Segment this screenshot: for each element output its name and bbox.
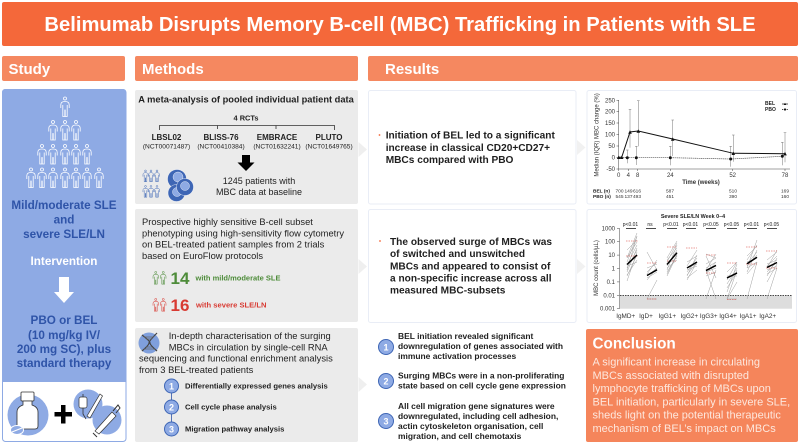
line: BEL xyxy=(617,129,787,159)
result card 2 xyxy=(368,210,576,322)
step 3 xyxy=(164,422,284,436)
description text: In-depth characterisation of the surging xyxy=(169,331,331,341)
chart card: MBC change over time xyxy=(587,90,796,204)
heading: methods: Methods xyxy=(142,61,204,78)
median lines xyxy=(627,253,777,278)
connector line xyxy=(170,386,172,429)
step 1: 1 xyxy=(169,382,174,392)
result 2: state based on cell cycle gene expression xyxy=(398,381,566,391)
y axis title: Median (IQR) MBC change (%) xyxy=(594,93,600,177)
patient counts table: 510 xyxy=(729,188,737,194)
y axis labels: 200 xyxy=(605,110,616,116)
description text: sequencing and functional enrichment analysis xyxy=(139,354,333,364)
significance labels: p<0.01 xyxy=(744,222,759,228)
arrows: results to charts xyxy=(577,140,586,274)
legend: BEL xyxy=(765,101,775,107)
y axis labels: 250 xyxy=(605,98,616,104)
significance labels: p<0.05 xyxy=(703,222,719,228)
patient counts table: 616 xyxy=(633,188,641,194)
y axis labels: 10 xyxy=(608,253,616,259)
below-detection band xyxy=(620,296,792,309)
result card 1: increase in classical CD20+CD27+ xyxy=(386,143,550,154)
y axis labels: 1000 xyxy=(602,226,616,232)
y axis labels: -50 xyxy=(606,167,616,173)
conclusion text: MBCs associated with disrupted xyxy=(592,370,749,382)
x axis title: Time (weeks) xyxy=(682,180,720,186)
significance labels: ns xyxy=(647,222,653,228)
category labels: IgG2+ xyxy=(681,313,698,320)
patient counts table: 169 xyxy=(781,188,789,194)
y axis labels: 0.001 xyxy=(600,307,616,313)
panel: RNA sequencing xyxy=(135,328,358,442)
category labels: IgMD+ xyxy=(616,313,635,320)
result list xyxy=(378,331,566,441)
trial names: LBSL02 xyxy=(152,133,182,142)
category labels: IgG4+ xyxy=(719,313,737,320)
intervention text: 200 mg SC), plus xyxy=(17,343,112,356)
y axis labels: 100 xyxy=(605,240,616,246)
error bars PBO xyxy=(626,142,784,167)
patient counts table: 160 xyxy=(781,194,789,200)
description text: on BEL-treated patient samples from 2 trials xyxy=(142,240,325,250)
y axis xyxy=(617,228,620,309)
y axis labels: 0.1 xyxy=(607,280,616,286)
result 3: 3 xyxy=(383,416,389,426)
description text: from 3 BEL-treated patients xyxy=(139,365,254,375)
step 1: Differentially expressed genes analysis xyxy=(185,382,328,390)
category labels: IgD+ xyxy=(639,313,653,320)
arrow: down xyxy=(54,277,74,303)
result 3: downregulated, including cell adhesion, xyxy=(398,411,558,421)
patient counts table: 545 xyxy=(615,194,624,200)
panel: meta-analysis xyxy=(135,90,358,204)
trial identifiers: (NCT00071487) xyxy=(143,144,190,150)
y axis labels: 50 xyxy=(608,144,616,150)
result 1: BEL initiation revealed significant xyxy=(398,331,534,341)
patient counts table: BEL (n) xyxy=(593,188,610,194)
patient counts table: 700 xyxy=(615,188,624,194)
result 3 xyxy=(378,401,558,441)
chart title: Severe SLE/LN Week 0–4 xyxy=(661,214,725,220)
threshold line xyxy=(620,294,792,296)
severe cohort: with severe SLE/LN xyxy=(195,300,266,310)
result card 1: MBCs compared with PBO xyxy=(386,155,514,166)
patient counts table: 390 xyxy=(729,194,737,200)
individual patient lines xyxy=(627,233,777,299)
result card 2: of switched and unswitched xyxy=(390,249,525,260)
x axis labels: 78 xyxy=(782,173,789,179)
result 1: immune activation processes xyxy=(398,351,516,361)
heading: results xyxy=(368,56,798,81)
x axis labels: 24 xyxy=(667,173,674,179)
y axis labels: 0.01 xyxy=(603,293,616,299)
icon: patient pyramid xyxy=(27,97,103,188)
icon: tablets bottle xyxy=(8,392,48,436)
description text: based on EuroFlow protocols xyxy=(142,251,263,261)
significance labels: p<0.01 xyxy=(623,222,638,228)
trial names: BLISS-76 xyxy=(203,133,239,142)
population text: and xyxy=(54,214,74,226)
line: PBO xyxy=(619,155,784,160)
step 2: Cell cycle phase analysis xyxy=(185,402,277,412)
reference dashes xyxy=(626,241,777,300)
label: 4 RCTs: 4 RCTs xyxy=(234,114,258,122)
population text: Mild/moderate SLE xyxy=(11,199,117,212)
conclusion text: BEL initiation, particularly in severe SLE, xyxy=(592,396,790,408)
severe cohort xyxy=(153,296,266,315)
panel heading: A meta-analysis of pooled individual patient data xyxy=(138,94,355,104)
conclusion text: mechanism of BEL’s impact on MBCs xyxy=(592,423,776,435)
error bars BEL xyxy=(629,101,786,162)
result 1 xyxy=(378,331,563,361)
icon: B cells xyxy=(168,170,194,202)
panel: flow cytometry xyxy=(135,209,358,322)
heading: results: Results xyxy=(385,61,439,78)
significance brackets xyxy=(626,228,777,230)
intervention text: PBO or BEL xyxy=(31,314,97,327)
result 2: Surging MBCs were in a non-proliferating xyxy=(398,371,564,381)
y axis labels: 0 xyxy=(612,155,616,161)
result card 2: MBCs and appeared to consist of xyxy=(390,262,551,272)
significance labels: p<0.05 xyxy=(724,222,739,228)
intervention text: standard therapy xyxy=(17,357,112,370)
description text: phenotyping using high-sensitivity flow cytometry xyxy=(142,228,344,238)
heading: study xyxy=(2,56,125,81)
result 3: actin cytoskeleton organisation, cell xyxy=(398,421,543,431)
x axis labels: 8 xyxy=(636,173,640,179)
description text: MBCs in circulation by single-cell RNA xyxy=(169,342,328,352)
y axis title: MBC count (cells/µL) xyxy=(594,240,600,296)
x axis labels: 0 xyxy=(617,173,621,179)
population text: severe SLE/LN xyxy=(23,228,105,241)
patient count text: 1245 patients with xyxy=(223,176,295,186)
significance labels: p<0.01 xyxy=(663,222,679,228)
description text: Prospective highly sensitive B-cell subset xyxy=(142,217,313,227)
patient counts table xyxy=(593,188,789,200)
trial identifiers: (NCT01649765) xyxy=(305,144,353,150)
trial identifiers: (NCT00410384) xyxy=(197,144,245,150)
patient counts table: 493 xyxy=(633,194,641,200)
mild/moderate cohort xyxy=(153,269,281,288)
title banner xyxy=(2,2,798,46)
step 3: Migration pathway analysis xyxy=(185,424,284,434)
result 3: migration, and cell chemotaxis xyxy=(398,431,522,441)
intervention label: Intervention xyxy=(31,255,97,268)
x axis labels: 4 xyxy=(627,173,631,179)
heading: study: Study xyxy=(8,61,51,78)
patient counts table: 137 xyxy=(624,194,633,200)
patient counts table: PBO (n) xyxy=(593,194,611,200)
chart card: MBC subset counts xyxy=(587,210,796,322)
result card 2: The observed surge of MBCs was xyxy=(390,237,552,248)
category labels: IgA2+ xyxy=(759,313,776,320)
y axis labels: 1 xyxy=(612,266,616,272)
trial names: PLUTO xyxy=(316,133,342,142)
trial names: EMBRACE xyxy=(257,133,298,142)
category labels: IgA1+ xyxy=(740,313,757,320)
step 2 xyxy=(164,400,277,414)
arrows: methods to results xyxy=(358,142,367,392)
result card 2: measured MBC-subsets xyxy=(390,286,506,297)
legend: PBO xyxy=(765,107,776,113)
result 2 xyxy=(378,371,566,391)
step 2: 2 xyxy=(169,402,174,412)
result card 2: a non-specific increase across all xyxy=(390,274,552,284)
patient counts table: 149 xyxy=(624,188,633,194)
category labels: IgG3+ xyxy=(700,313,718,320)
icon: IV and injection xyxy=(74,390,122,437)
category labels: IgG1+ xyxy=(659,313,676,320)
patient count text: MBC data at baseline xyxy=(216,187,302,197)
title banner: Belimumab Disrupts Memory B-cell (MBC) Trafficking in Patients with SLE xyxy=(44,14,756,36)
conclusion text: lymphocyte trafficking of MBCs upon xyxy=(592,383,771,395)
result card 1: Initiation of BEL led to a significant xyxy=(386,131,555,142)
significance labels: p<0.01 xyxy=(683,222,698,228)
axes xyxy=(616,100,790,171)
result 3: All cell migration gene signatures were xyxy=(398,401,555,411)
result 1: downregulation of genes associated with xyxy=(398,341,563,351)
result 1: 1 xyxy=(383,342,389,352)
severe cohort: 16 xyxy=(170,296,189,315)
y axis labels: 150 xyxy=(605,121,616,127)
icon: plus xyxy=(54,405,72,424)
x axis labels: 52 xyxy=(729,173,737,179)
heading: methods xyxy=(135,56,358,81)
legend xyxy=(765,101,788,113)
arrow: black down xyxy=(238,155,254,171)
panel: conclusion xyxy=(586,329,798,442)
icon: DNA xyxy=(138,332,160,354)
mild/moderate cohort: with mild/moderate SLE xyxy=(194,274,281,282)
intervention text: (10 mg/kg IV/ xyxy=(28,329,101,342)
step 3: 3 xyxy=(169,424,174,434)
significance labels: p<0.05 xyxy=(764,222,779,228)
panel: study xyxy=(2,89,126,442)
patient counts table: 451 xyxy=(666,194,674,200)
conclusion text: A significant increase in circulating xyxy=(592,356,760,368)
conclusion heading: Conclusion xyxy=(592,336,676,352)
result card 1 xyxy=(368,90,576,204)
bracket tree xyxy=(160,126,334,130)
icon: patients xyxy=(143,170,160,197)
mild/moderate cohort: 14 xyxy=(170,269,190,288)
y axis labels: 100 xyxy=(605,132,616,138)
conclusion text: sheds light on the potential therapeutic xyxy=(592,410,781,422)
result 2: 2 xyxy=(383,376,389,386)
step 1 xyxy=(164,379,328,393)
patient counts table: 587 xyxy=(666,188,674,194)
trial identifiers: (NCT01632241) xyxy=(253,144,301,150)
